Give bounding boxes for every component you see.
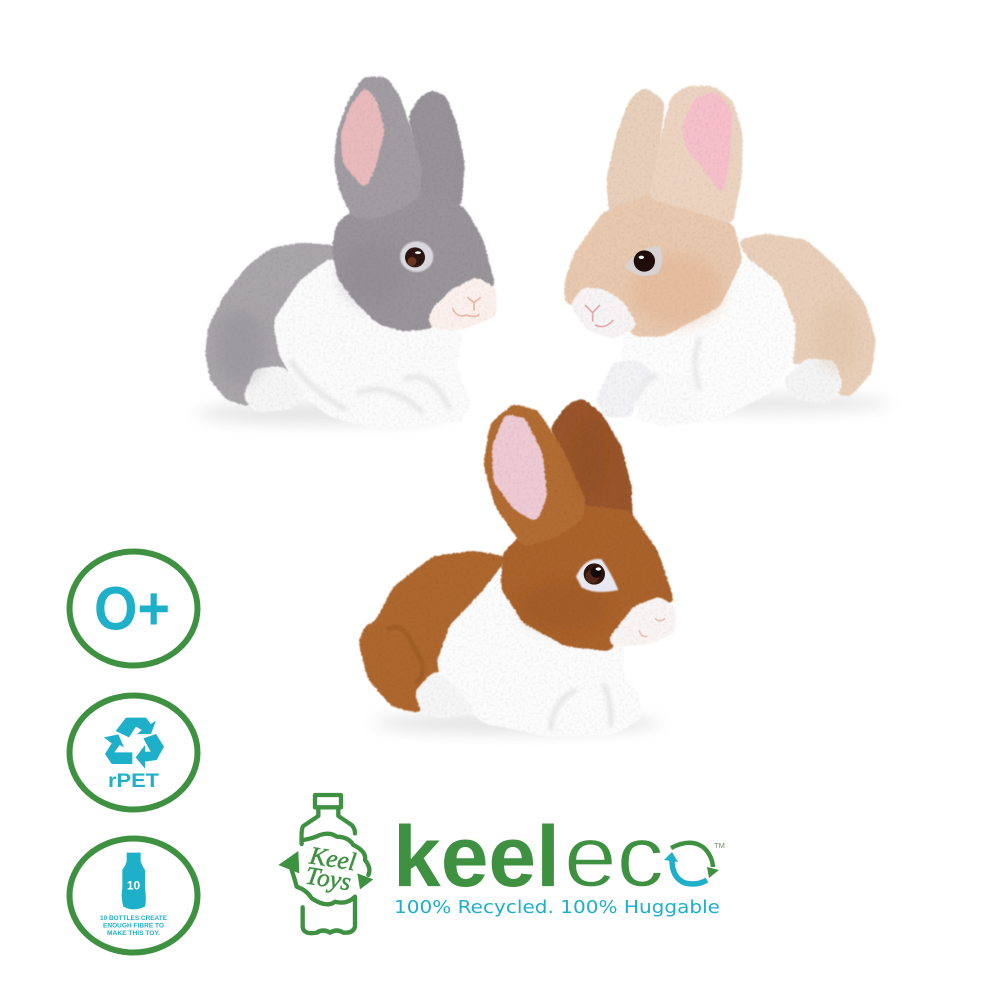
badge ring bbox=[70, 838, 198, 952]
age text: O+ bbox=[94, 574, 170, 642]
icon: looping o bbox=[664, 843, 719, 884]
Keel Toys wordmark bbox=[304, 841, 358, 896]
badge: rPET bbox=[70, 696, 198, 810]
icon: recycling arrows bbox=[104, 718, 164, 769]
eco text: ec bbox=[564, 809, 664, 905]
nose and mouth stitching bbox=[453, 297, 481, 316]
fur shading bbox=[215, 240, 407, 383]
badge ring bbox=[70, 696, 198, 810]
ground shadow bbox=[197, 403, 450, 424]
rabbit: gray bbox=[197, 77, 497, 431]
Keel Toys wordmark: Keel bbox=[307, 841, 358, 876]
plush fur shapes bbox=[358, 397, 677, 737]
recycling arrowheads bbox=[278, 851, 373, 889]
hind leg shading bbox=[387, 627, 423, 683]
badge: ten bottles bbox=[70, 838, 198, 952]
trademark: TM bbox=[714, 841, 725, 850]
eye bbox=[576, 559, 618, 592]
bottle caption: 10 BOTTLES CREATE bbox=[100, 915, 168, 922]
Keel Toys wordmark: Toys bbox=[304, 862, 353, 896]
nose and mouth stitching bbox=[585, 305, 613, 327]
eye bbox=[625, 246, 662, 276]
fur shading bbox=[630, 253, 860, 373]
nose bbox=[639, 618, 665, 637]
badge ring bbox=[70, 552, 198, 666]
bottle outline bbox=[292, 795, 369, 933]
rPET label: rPET bbox=[108, 771, 159, 792]
plush fur shapes bbox=[205, 77, 497, 431]
eye bbox=[400, 241, 433, 272]
rabbit: brown bbox=[358, 397, 677, 737]
tagline: 100% Recycled. 100% Huggable bbox=[394, 898, 720, 918]
rabbit: beige bbox=[564, 86, 890, 427]
paw creases bbox=[635, 337, 700, 400]
logo: Keel Toys recycled bottle bbox=[278, 795, 373, 933]
ground shadow bbox=[373, 713, 660, 733]
bottle number: 10 bbox=[127, 878, 140, 892]
paw creases bbox=[290, 360, 450, 413]
keel text: keel bbox=[393, 809, 560, 905]
bottle caption bbox=[100, 915, 168, 937]
logo: keeleco wordmark bbox=[393, 809, 725, 905]
ground shadow bbox=[637, 393, 890, 413]
fur shading bbox=[520, 420, 607, 630]
icon: bottle bbox=[122, 853, 146, 909]
bottle caption: MAKE THIS TOY. bbox=[107, 930, 160, 937]
bottle caption: ENOUGH FIBRE TO bbox=[103, 922, 164, 930]
badge: age 0+ bbox=[70, 552, 198, 666]
plush fur shapes bbox=[564, 86, 876, 427]
paw creases bbox=[550, 683, 611, 730]
